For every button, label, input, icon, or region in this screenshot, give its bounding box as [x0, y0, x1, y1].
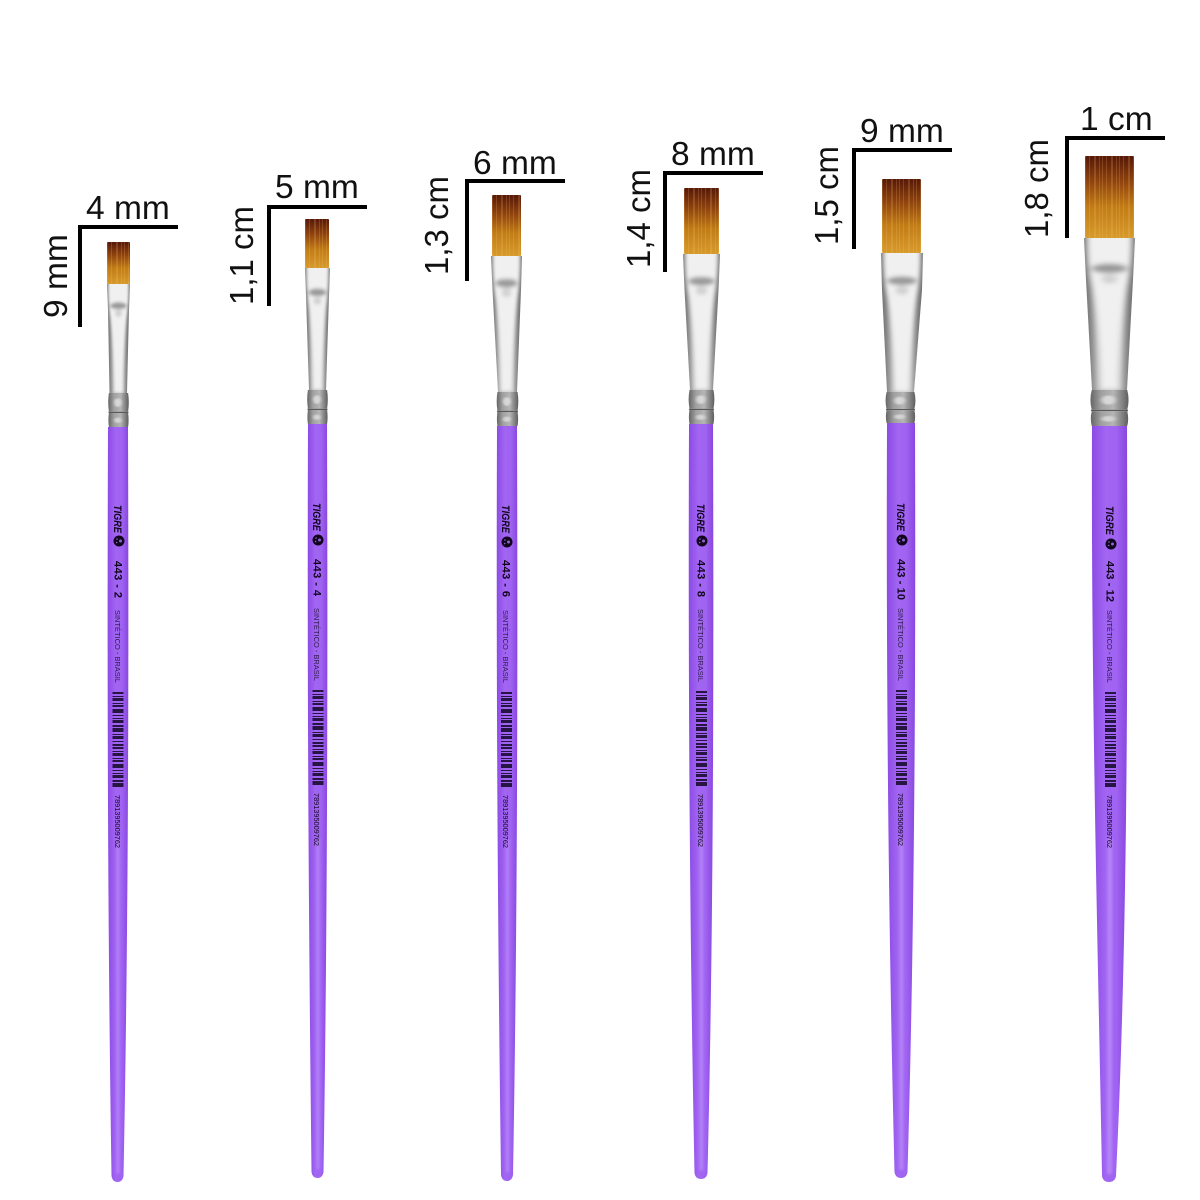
material: SINTÉTICO - BRASIL — [501, 610, 510, 683]
barcode — [1105, 692, 1116, 787]
ferrule — [305, 268, 330, 390]
rings — [1090, 390, 1129, 426]
dimensions 1 — [38, 190, 178, 327]
width label: 8 mm — [671, 136, 755, 173]
ferrule — [683, 254, 720, 390]
rings — [689, 390, 714, 424]
brush 2: size 443-4 — [305, 219, 330, 1178]
ferrule highlight — [108, 279, 129, 393]
material: SINTÉTICO - BRASIL — [1105, 610, 1114, 683]
handle print — [499, 505, 512, 848]
bristle strands — [305, 219, 329, 268]
model: 443 - 8 — [694, 560, 706, 597]
handle highlight — [1107, 840, 1112, 1172]
bristle strands — [107, 242, 130, 284]
rings — [307, 390, 328, 424]
bristles — [492, 195, 521, 256]
barcode — [312, 690, 324, 785]
barcode number: 7891395009762 — [696, 794, 705, 847]
model: 443 - 4 — [310, 559, 322, 597]
logo — [312, 534, 324, 546]
handle — [308, 424, 327, 1178]
material: SINTÉTICO - BRASIL — [696, 609, 705, 682]
ferrule — [1084, 238, 1135, 390]
brand: TIGRE — [894, 503, 906, 532]
bristles — [1085, 156, 1134, 238]
bristles — [107, 242, 130, 284]
handle print — [310, 503, 324, 846]
bristle strands — [492, 195, 521, 256]
bristles — [882, 179, 921, 253]
handle — [497, 426, 517, 1181]
handle — [1092, 426, 1127, 1182]
brand: TIGRE — [111, 505, 123, 534]
handle print — [1103, 506, 1116, 848]
handle highlight — [316, 840, 320, 1168]
width label: 1 cm — [1080, 101, 1153, 138]
model: 443 - 6 — [500, 560, 512, 597]
bracket — [269, 207, 367, 306]
barcode number: 7891395009762 — [501, 795, 510, 848]
ferrule highlight — [685, 247, 718, 390]
handle highlight — [900, 840, 904, 1168]
bristle strands — [684, 188, 719, 254]
bracket — [665, 173, 763, 272]
bracket — [80, 227, 178, 327]
barcode number: 7891395009762 — [312, 793, 321, 846]
ferrule highlight — [306, 262, 328, 390]
rings — [886, 392, 915, 423]
width label: 9 mm — [860, 113, 944, 150]
ferrule — [881, 253, 923, 392]
handle — [689, 424, 713, 1179]
brand: TIGRE — [694, 504, 706, 533]
brush 3: size 443-6 — [491, 195, 522, 1181]
handle highlight — [506, 840, 509, 1171]
brush 1: size 443-2 — [107, 242, 130, 1182]
brush 6: size 443-12 — [1084, 156, 1135, 1182]
brand: TIGRE — [1103, 506, 1115, 536]
ferrule — [491, 256, 522, 392]
width label: 4 mm — [86, 190, 170, 227]
model: 443 - 12 — [1104, 561, 1116, 602]
dimensions 2 — [223, 169, 367, 306]
barcode — [896, 690, 907, 785]
handle — [887, 423, 915, 1178]
rings — [497, 392, 518, 426]
barcode — [501, 692, 512, 787]
handle — [108, 427, 128, 1182]
model: 443 - 10 — [894, 559, 906, 600]
bristles — [684, 188, 719, 254]
brand: TIGRE — [499, 505, 511, 534]
width label: 5 mm — [275, 169, 359, 206]
brand: TIGRE — [310, 503, 322, 532]
length label: 9 mm — [38, 234, 75, 318]
barcode — [696, 691, 707, 786]
ferrule highlight — [493, 249, 520, 392]
dimensions 3 — [418, 145, 565, 281]
barcode number: 7891395009762 — [113, 795, 122, 848]
bristles — [305, 219, 329, 268]
dimensions 5 — [808, 113, 952, 249]
logo — [696, 536, 708, 546]
material: SINTÉTICO - BRASIL — [312, 608, 321, 681]
handle print — [694, 504, 708, 847]
length label: 1,4 cm — [620, 169, 657, 268]
barcode number: 7891395009762 — [896, 793, 905, 846]
dimensions 4 — [620, 136, 763, 272]
barcode number: 7891395009762 — [1105, 795, 1114, 848]
barcode — [112, 692, 124, 787]
bristle strands — [882, 179, 921, 253]
handle print — [111, 505, 124, 848]
logo — [114, 536, 124, 546]
material: SINTÉTICO - BRASIL — [896, 608, 905, 681]
dimensions 6 — [1018, 101, 1165, 238]
brush 5: size 443-10 — [881, 179, 923, 1178]
ferrule highlight — [884, 246, 920, 392]
length label: 1,1 cm — [223, 206, 260, 305]
width label: 6 mm — [473, 145, 557, 182]
logo — [502, 536, 512, 548]
ferrule — [107, 284, 130, 393]
material: SINTÉTICO - BRASIL — [113, 610, 122, 683]
brush 4: size 443-8 — [683, 188, 720, 1179]
length label: 1,3 cm — [418, 176, 455, 275]
ferrule highlight — [1087, 230, 1132, 390]
length label: 1,8 cm — [1018, 139, 1055, 238]
bracket — [1067, 138, 1165, 238]
logo — [896, 534, 908, 546]
bracket — [467, 181, 565, 281]
handle highlight — [700, 840, 703, 1169]
handle print — [894, 503, 908, 846]
bracket — [854, 150, 952, 249]
logo — [1106, 538, 1116, 550]
model: 443 - 2 — [112, 561, 124, 598]
handle highlight — [116, 840, 120, 1172]
rings — [108, 393, 129, 427]
length label: 1,5 cm — [808, 146, 845, 245]
bristle strands — [1085, 156, 1134, 238]
